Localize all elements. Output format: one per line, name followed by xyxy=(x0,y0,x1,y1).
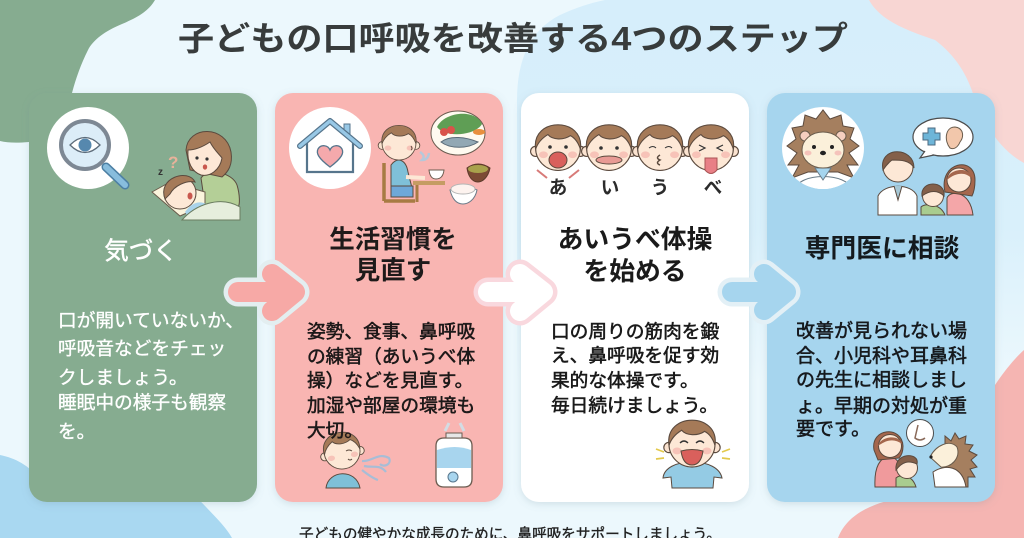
icon: child breathing through nose xyxy=(317,429,390,488)
body text: 要です。 xyxy=(796,419,870,440)
body text: を。 xyxy=(58,421,95,442)
body text xyxy=(796,320,967,440)
body text: の練習（あいうべ体 xyxy=(307,346,475,367)
title: 子どもの口呼吸を改善する4つのステップ xyxy=(178,20,848,57)
face labels: い xyxy=(601,177,619,198)
body text: 大切。 xyxy=(307,420,363,441)
body text: 睡眠中の様子も観察 xyxy=(58,392,226,413)
heading: 専門医に相談 xyxy=(805,234,960,263)
body text: え、鼻呼吸を促す効 xyxy=(551,345,719,366)
face labels: べ xyxy=(704,177,722,198)
body text: 操）などを見直す。 xyxy=(307,370,473,391)
panel: step 4 specialist xyxy=(767,93,995,502)
icon: mother watching sleeping child: ? xyxy=(168,153,178,172)
panel: step 3 exercise xyxy=(521,93,749,502)
body text: 合、小児科や耳鼻科 xyxy=(796,345,967,367)
face u xyxy=(633,125,687,170)
arrow: step 1 to 2 xyxy=(238,274,295,311)
body text: ょ。早期の対処が重 xyxy=(796,395,967,417)
face labels xyxy=(549,177,722,198)
panel: step 2 lifestyle xyxy=(275,93,503,502)
body text xyxy=(58,310,244,442)
heading: 生活習慣を xyxy=(329,226,457,254)
body text: 呼吸音などをチェッ xyxy=(58,338,226,359)
body text: 口の周りの筋肉を鍛 xyxy=(551,321,719,342)
icon: magnifying glass with eye xyxy=(47,107,129,189)
body text xyxy=(551,321,719,416)
body text: の先生に相談しまし xyxy=(796,369,967,391)
heading: 見直す xyxy=(355,257,431,285)
arrow: step 3 to 4 xyxy=(732,274,786,310)
panel: step 1 notice xyxy=(29,93,257,502)
body text xyxy=(307,321,475,441)
icon: mother watching sleeping child: z xyxy=(158,167,163,178)
face be xyxy=(684,125,738,174)
heading xyxy=(329,226,457,285)
body text: 加湿や部屋の環境も xyxy=(307,395,475,416)
icon: hedgehog doctor xyxy=(782,107,864,190)
icon: humidifier xyxy=(436,423,472,487)
heading: を始める xyxy=(583,257,687,286)
icon: house with heart xyxy=(289,107,371,189)
icon: child eating at table xyxy=(378,111,490,204)
icon: mother watching sleeping child xyxy=(152,131,240,220)
icon: doctor with parent and child xyxy=(878,118,975,215)
body text: クしましょう。 xyxy=(58,367,188,388)
face labels: あ xyxy=(549,177,567,198)
heading: 気づく xyxy=(104,237,178,265)
face labels: う xyxy=(651,177,669,198)
body text: 毎日続けましょう。 xyxy=(551,395,718,416)
body text: 姿勢、食事、鼻呼吸 xyxy=(307,321,475,342)
heading: あいうべ体操 xyxy=(558,225,713,254)
icon: parent and child with hedgehog doctor xyxy=(874,420,977,487)
icon: four faces a-i-u-be xyxy=(531,125,738,198)
face i xyxy=(582,125,636,170)
body text: 改善が見られない場 xyxy=(796,320,967,342)
body text: 果的な体操です。 xyxy=(551,370,699,391)
icon: smiling child stretching cheeks xyxy=(656,420,730,488)
arrow: step 2 to 3 xyxy=(488,274,543,311)
face a xyxy=(531,125,585,178)
heading xyxy=(558,225,713,286)
body text: 口が開いていないか、 xyxy=(58,310,244,331)
